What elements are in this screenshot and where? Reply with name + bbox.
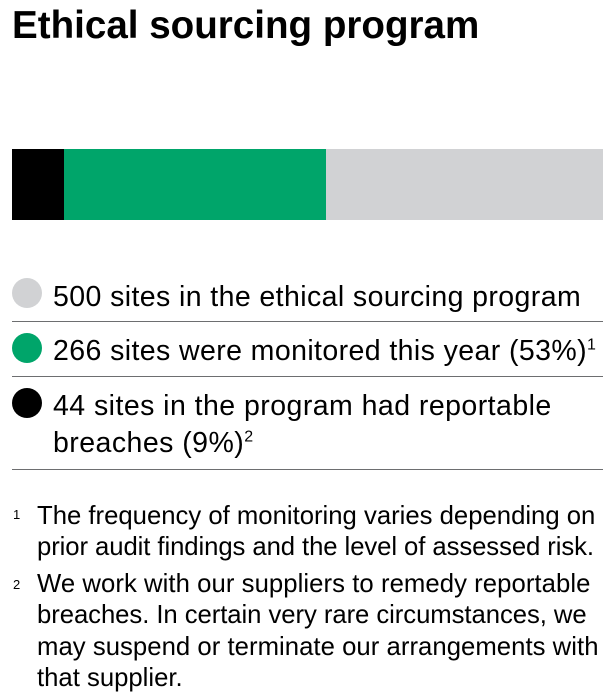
bar segment: monitored sites [64,149,326,220]
footnote marker 2: 2 [13,577,20,592]
footnote text 2: breaches. In certain very rare circumstances, we [37,601,587,629]
footnote text 1: The frequency of monitoring varies depending on [37,502,595,530]
bar segment: reportable breaches [12,149,64,220]
footnote text 1 [37,502,595,561]
legend [12,278,603,470]
legend text: sites in program: 500 sites in the ethical sourcing program [53,281,581,313]
legend icon: green dot [12,333,42,363]
legend text: sites monitored: 266 sites were monitored this year (53%)1 [53,335,596,367]
footnote text 2 [37,570,599,692]
legend icon: black dot [12,388,42,418]
footnotes [13,502,599,692]
legend icon: grey dot [12,278,42,308]
footnote text 1: prior audit findings and the level of assessed risk. [37,533,594,561]
stacked bar chart [12,149,603,220]
legend text: reportable breaches: breaches (9%)2 [53,427,253,459]
footnote text 2: may suspend or terminate our arrangements with [37,633,599,661]
title: Ethical sourcing program [12,4,479,47]
legend text: reportable breaches: 44 sites in the program had reportable [53,390,552,422]
footnote marker 1: 1 [13,507,20,522]
footnote text 2: We work with our suppliers to remedy reportable [37,570,590,598]
footnote text 2: that supplier. [37,664,183,692]
legend text: reportable breaches [53,390,552,459]
